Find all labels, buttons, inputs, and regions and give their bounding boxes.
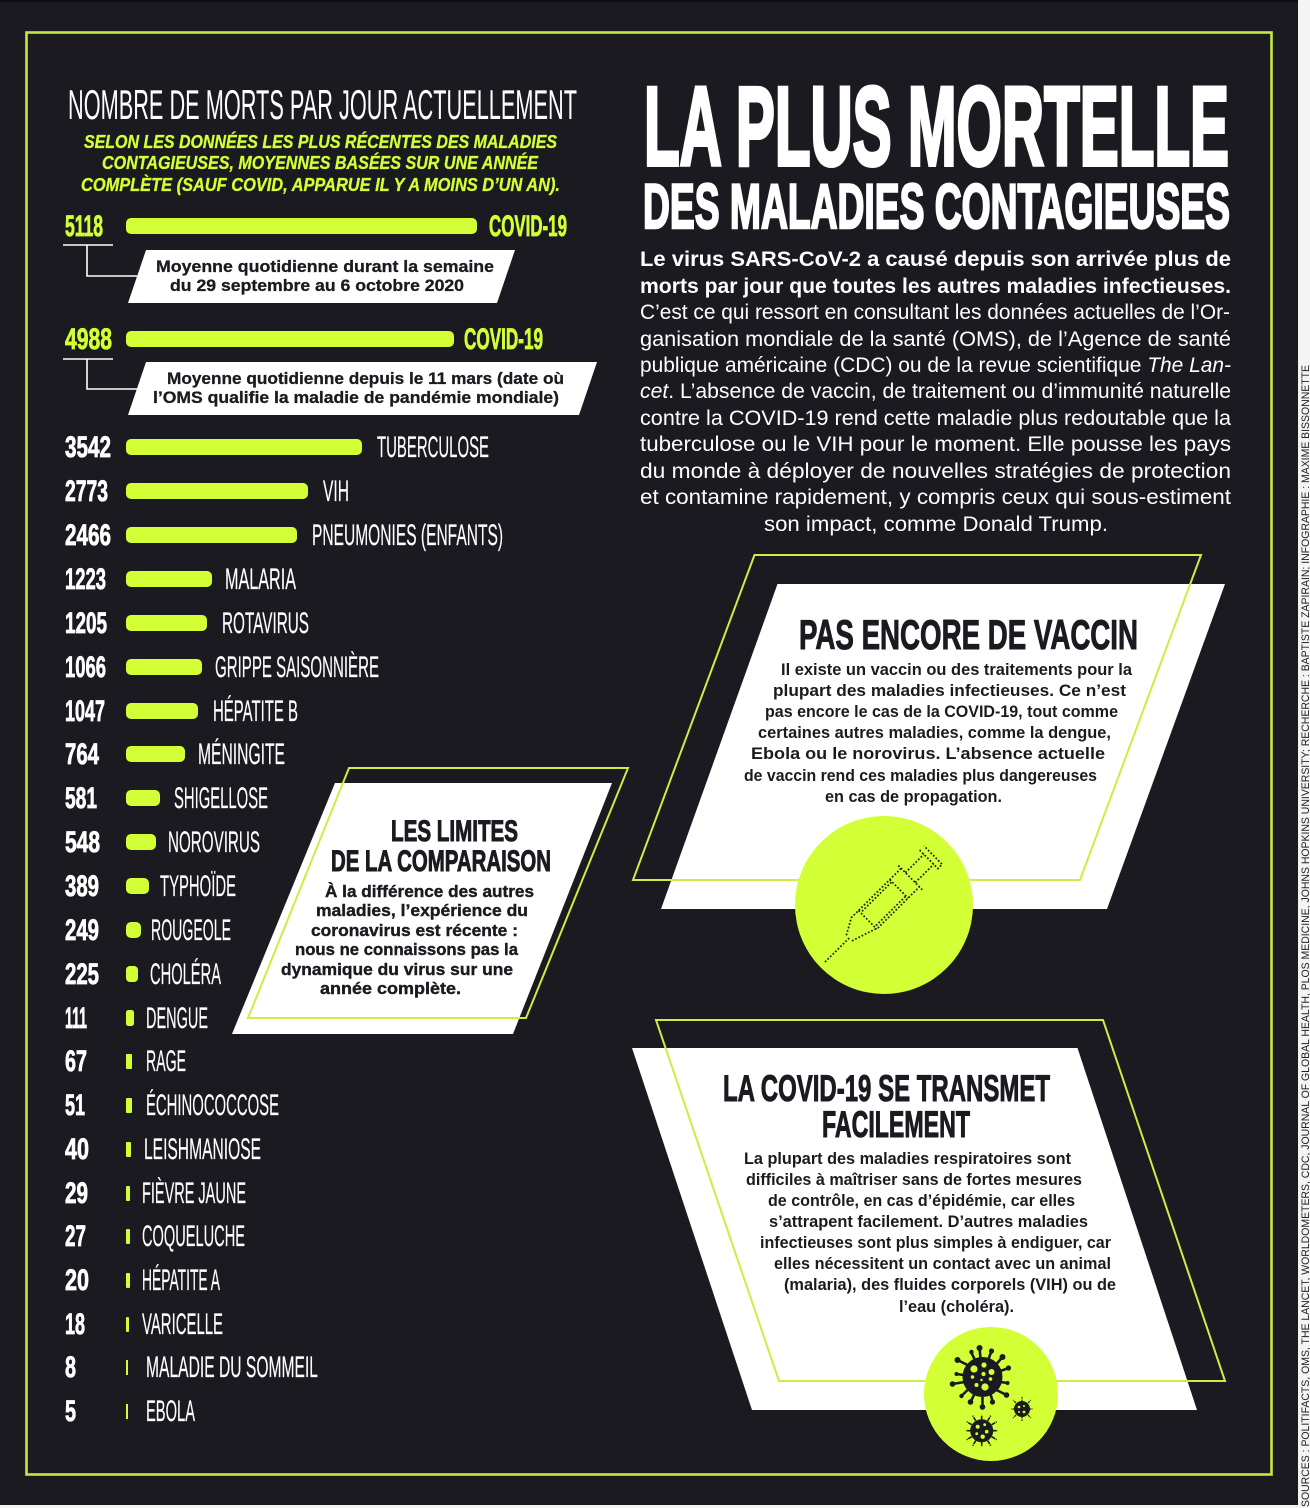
callout: average since March: Moyenne quotidienne depuis le 11 mars (date où <box>167 369 564 388</box>
row: malaria: MALARIA <box>225 563 296 596</box>
row: choléra: 225 <box>65 958 99 991</box>
row: tuberculose: 3542 <box>65 431 111 464</box>
icon: syringe <box>795 816 973 994</box>
intro paragraph: du monde à déployer de nouvelles stratégies de protection <box>640 460 1231 483</box>
bar chart: deaths per day: VARICELLE <box>142 1308 223 1341</box>
row: norovirus: 548 <box>65 826 100 859</box>
row: ebola: 5 <box>65 1395 76 1428</box>
bar chart: deaths per day: ÉCHINOCOCCOSE <box>146 1089 279 1122</box>
chart subtitle <box>81 131 560 195</box>
row: pneumonies: 2466 <box>65 519 111 552</box>
text: vaccin: en cas de propagation. <box>825 787 1002 806</box>
row: VIH: VIH <box>323 475 349 508</box>
row: shigellose <box>65 782 268 815</box>
row: rougeole <box>65 914 231 947</box>
row: méningite <box>65 738 285 771</box>
row: échinococcose <box>65 1089 279 1122</box>
intro paragraph: cet. L’absence de vaccin, de traitement ou d’immunité naturelle <box>640 380 1231 403</box>
bar chart: deaths per day: CHOLÉRA <box>150 958 221 991</box>
text: limites <box>281 882 534 998</box>
row: hépatite A: 20 <box>65 1264 89 1297</box>
callout: weekly average <box>128 250 515 303</box>
row: grippe saisonnière: 1066 <box>65 651 106 684</box>
bar chart: deaths per day: RAGE <box>146 1045 186 1078</box>
intro paragraph: contre la COVID-19 rend cette maladie plus redoutable que la <box>640 407 1231 430</box>
icon: viruses <box>924 1327 1058 1461</box>
row: maladie du sommeil <box>65 1351 318 1384</box>
row: grippe saisonnière <box>65 651 379 684</box>
text: transmission: infectieuses sont plus simples à endiguer, car <box>760 1233 1111 1252</box>
row: dengue: 111 <box>65 1002 87 1035</box>
row: fièvre jaune <box>65 1177 246 1210</box>
row: rotavirus: ROTAVIRUS <box>222 607 309 640</box>
callout: average since March <box>128 362 597 415</box>
row: méningite: 764 <box>65 738 99 771</box>
row: rotavirus: 1205 <box>65 607 107 640</box>
chart heading: NOMBRE DE MORTS PAR JOUR ACTUELLEMENT <box>68 81 577 128</box>
row: fièvre jaune: 29 <box>65 1177 88 1210</box>
text: transmission: de contrôle, en cas d’épidémie, car elles <box>768 1191 1075 1210</box>
row: grippe saisonnière: GRIPPE SAISONNIÈRE <box>215 651 379 684</box>
intro paragraph <box>640 248 1231 536</box>
row: norovirus: NOROVIRUS <box>168 826 260 859</box>
row: dengue <box>65 1002 208 1035</box>
text: vaccin <box>744 660 1133 806</box>
text: transmission: elles nécessitent un contact avec un animal <box>774 1254 1111 1273</box>
callout: average since March: l’OMS qualifie la maladie de pandémie mondiale) <box>153 388 559 407</box>
row: coqueluche: 27 <box>65 1220 86 1253</box>
heading: transmission <box>723 1068 1050 1145</box>
heading: vaccin: PAS ENCORE DE VACCIN <box>799 611 1138 658</box>
row: choléra <box>65 958 221 991</box>
row: varicelle: 18 <box>65 1308 85 1341</box>
bar chart: deaths per day: HÉPATITE A <box>142 1264 220 1297</box>
text: limites: maladies, l’expérience du <box>316 901 528 920</box>
row: typhoïde <box>65 870 236 903</box>
intro paragraph: son impact, comme Donald Trump. <box>764 513 1108 536</box>
row: rougeole: 249 <box>65 914 99 947</box>
row: leishmaniose: 40 <box>65 1133 89 1166</box>
row: rage <box>65 1045 186 1078</box>
credits strip <box>1298 0 1310 1508</box>
row: hépatite B: 1047 <box>65 695 105 728</box>
callout: weekly average: Moyenne quotidienne durant la semaine <box>156 257 494 276</box>
connector: weekly <box>63 245 137 276</box>
row: VIH <box>65 475 349 508</box>
row: échinococcose: 51 <box>65 1089 85 1122</box>
text: limites: coronavirus est récente : <box>311 921 518 940</box>
row: shigellose: 581 <box>65 782 97 815</box>
bar chart: deaths per day: HÉPATITE B <box>213 695 298 728</box>
icon: large virus <box>950 1345 1011 1410</box>
text: transmission: (malaria), des fluides corporels (VIH) ou de <box>784 1275 1116 1294</box>
bar chart: deaths per day: COQUELUCHE <box>142 1220 245 1253</box>
text: limites: À la différence des autres <box>325 882 534 901</box>
row: COVID-19 since March: COVID-19 <box>464 323 543 356</box>
text: limites: année complète. <box>320 979 461 998</box>
row: malaria: 1223 <box>65 563 106 596</box>
row: leishmaniose: LEISHMANIOSE <box>144 1133 261 1166</box>
heading: limites: LES LIMITES <box>391 815 518 848</box>
row: norovirus <box>65 826 260 859</box>
text: transmission: l’eau (choléra). <box>899 1297 1014 1316</box>
row: méningite: MÉNINGITE <box>198 738 285 771</box>
bar chart: deaths per day: EBOLA <box>146 1395 195 1428</box>
bar chart: deaths per day: TYPHOÏDE <box>160 870 236 903</box>
row: ebola <box>65 1395 195 1428</box>
text: vaccin: certaines autres maladies, comme la dengue, <box>758 723 1111 742</box>
row: COVID-19 weekly: 5118 <box>65 210 103 243</box>
intro paragraph: morts par jour que toutes les autres maladies infectieuses. <box>640 275 1231 298</box>
row: COVID-19 since March: 4988 <box>65 323 112 356</box>
icon: medium virus <box>966 1415 998 1447</box>
heading: transmission: FACILEMENT <box>822 1104 970 1145</box>
text: limites: nous ne connaissons pas la <box>295 940 519 959</box>
bar chart: deaths per day: DENGUE <box>146 1002 208 1035</box>
heading: limites: DE LA COMPARAISON <box>331 845 551 878</box>
panel: limites de la comparaison <box>232 768 628 1034</box>
connector: since March <box>63 359 137 389</box>
row: hépatite B <box>65 695 298 728</box>
text: transmission <box>744 1149 1116 1316</box>
chart subtitle: SELON LES DONNÉES LES PLUS RÉCENTES DES MALADIES <box>84 131 557 152</box>
text: vaccin: Il existe un vaccin ou des traitements pour la <box>781 660 1133 679</box>
intro paragraph: tuberculose ou le VIH pour le moment. Elle pousse les pays <box>640 433 1231 456</box>
row: COVID-19 weekly <box>65 210 567 243</box>
row: COVID-19 weekly: COVID-19 <box>489 210 567 243</box>
row: coqueluche <box>65 1220 245 1253</box>
intro paragraph: Le virus SARS-CoV-2 a causé depuis son arrivée plus de <box>640 248 1231 271</box>
row: pneumonies <box>65 519 503 552</box>
text: transmission: La plupart des maladies respiratoires sont <box>744 1149 1071 1168</box>
text: transmission: difficiles à maîtriser sans de fortes mesures <box>746 1170 1082 1189</box>
row: leishmaniose <box>65 1133 261 1166</box>
bar chart: deaths per day <box>63 210 597 1428</box>
text: transmission: s’attrapent facilement. D’autres maladies <box>769 1212 1088 1231</box>
row: rotavirus <box>65 607 309 640</box>
text: limites: dynamique du virus sur une <box>281 960 513 979</box>
icon: small virus <box>1011 1397 1033 1421</box>
row: hépatite A <box>65 1264 220 1297</box>
bar chart: deaths per day: SHIGELLOSE <box>174 782 268 815</box>
text: vaccin: pas encore le cas de la COVID-19, tout comme <box>765 702 1118 721</box>
text: vaccin: Ebola ou le norovirus. L’absence actuelle <box>751 744 1105 763</box>
bar chart: deaths per day: FIÈVRE JAUNE <box>142 1177 246 1210</box>
chart subtitle: COMPLÈTE (SAUF COVID, APPARUE IL Y A MOINS D’UN AN). <box>81 174 560 195</box>
panel: la covid-19 se transmet facilement <box>632 1020 1225 1461</box>
row: maladie du sommeil: MALADIE DU SOMMEIL <box>146 1351 318 1384</box>
row: COVID-19 since March <box>65 323 543 356</box>
row: maladie du sommeil: 8 <box>65 1351 76 1384</box>
intro paragraph: C’est ce qui ressort en consultant les données actuelles de l’Or- <box>640 301 1230 324</box>
row: typhoïde: 389 <box>65 870 99 903</box>
row: malaria <box>65 563 296 596</box>
heading: transmission: LA COVID-19 SE TRANSMET <box>723 1068 1050 1109</box>
chart subtitle: CONTAGIEUSES, MOYENNES BASÉES SUR UNE ANNÉE <box>102 152 539 173</box>
intro paragraph: ganisation mondiale de la santé (OMS), de l’Agence de santé <box>640 328 1231 351</box>
text: vaccin: plupart des maladies infectieuses. Ce n’est <box>773 681 1126 700</box>
row: VIH: 2773 <box>65 475 108 508</box>
intro paragraph: et contamine rapidement, y compris ceux qui sous-estiment <box>640 486 1231 509</box>
bar chart: deaths per day: ROUGEOLE <box>151 914 231 947</box>
panel: pas encore de vaccin <box>633 555 1225 994</box>
heading: limites <box>331 815 551 878</box>
row: pneumonies: PNEUMONIES (ENFANTS) <box>312 519 503 552</box>
text: vaccin: de vaccin rend ces maladies plus dangereuses <box>744 766 1097 785</box>
intro paragraph: publique américaine (CDC) ou de la revue scientifique The Lan- <box>640 354 1231 377</box>
row: tuberculose <box>65 431 489 464</box>
row: rage: 67 <box>65 1045 87 1078</box>
row: varicelle <box>65 1308 223 1341</box>
title <box>643 64 1230 242</box>
bar chart: deaths per day: TUBERCULOSE <box>377 431 489 464</box>
callout: weekly average: du 29 septembre au 6 octobre 2020 <box>170 276 464 295</box>
